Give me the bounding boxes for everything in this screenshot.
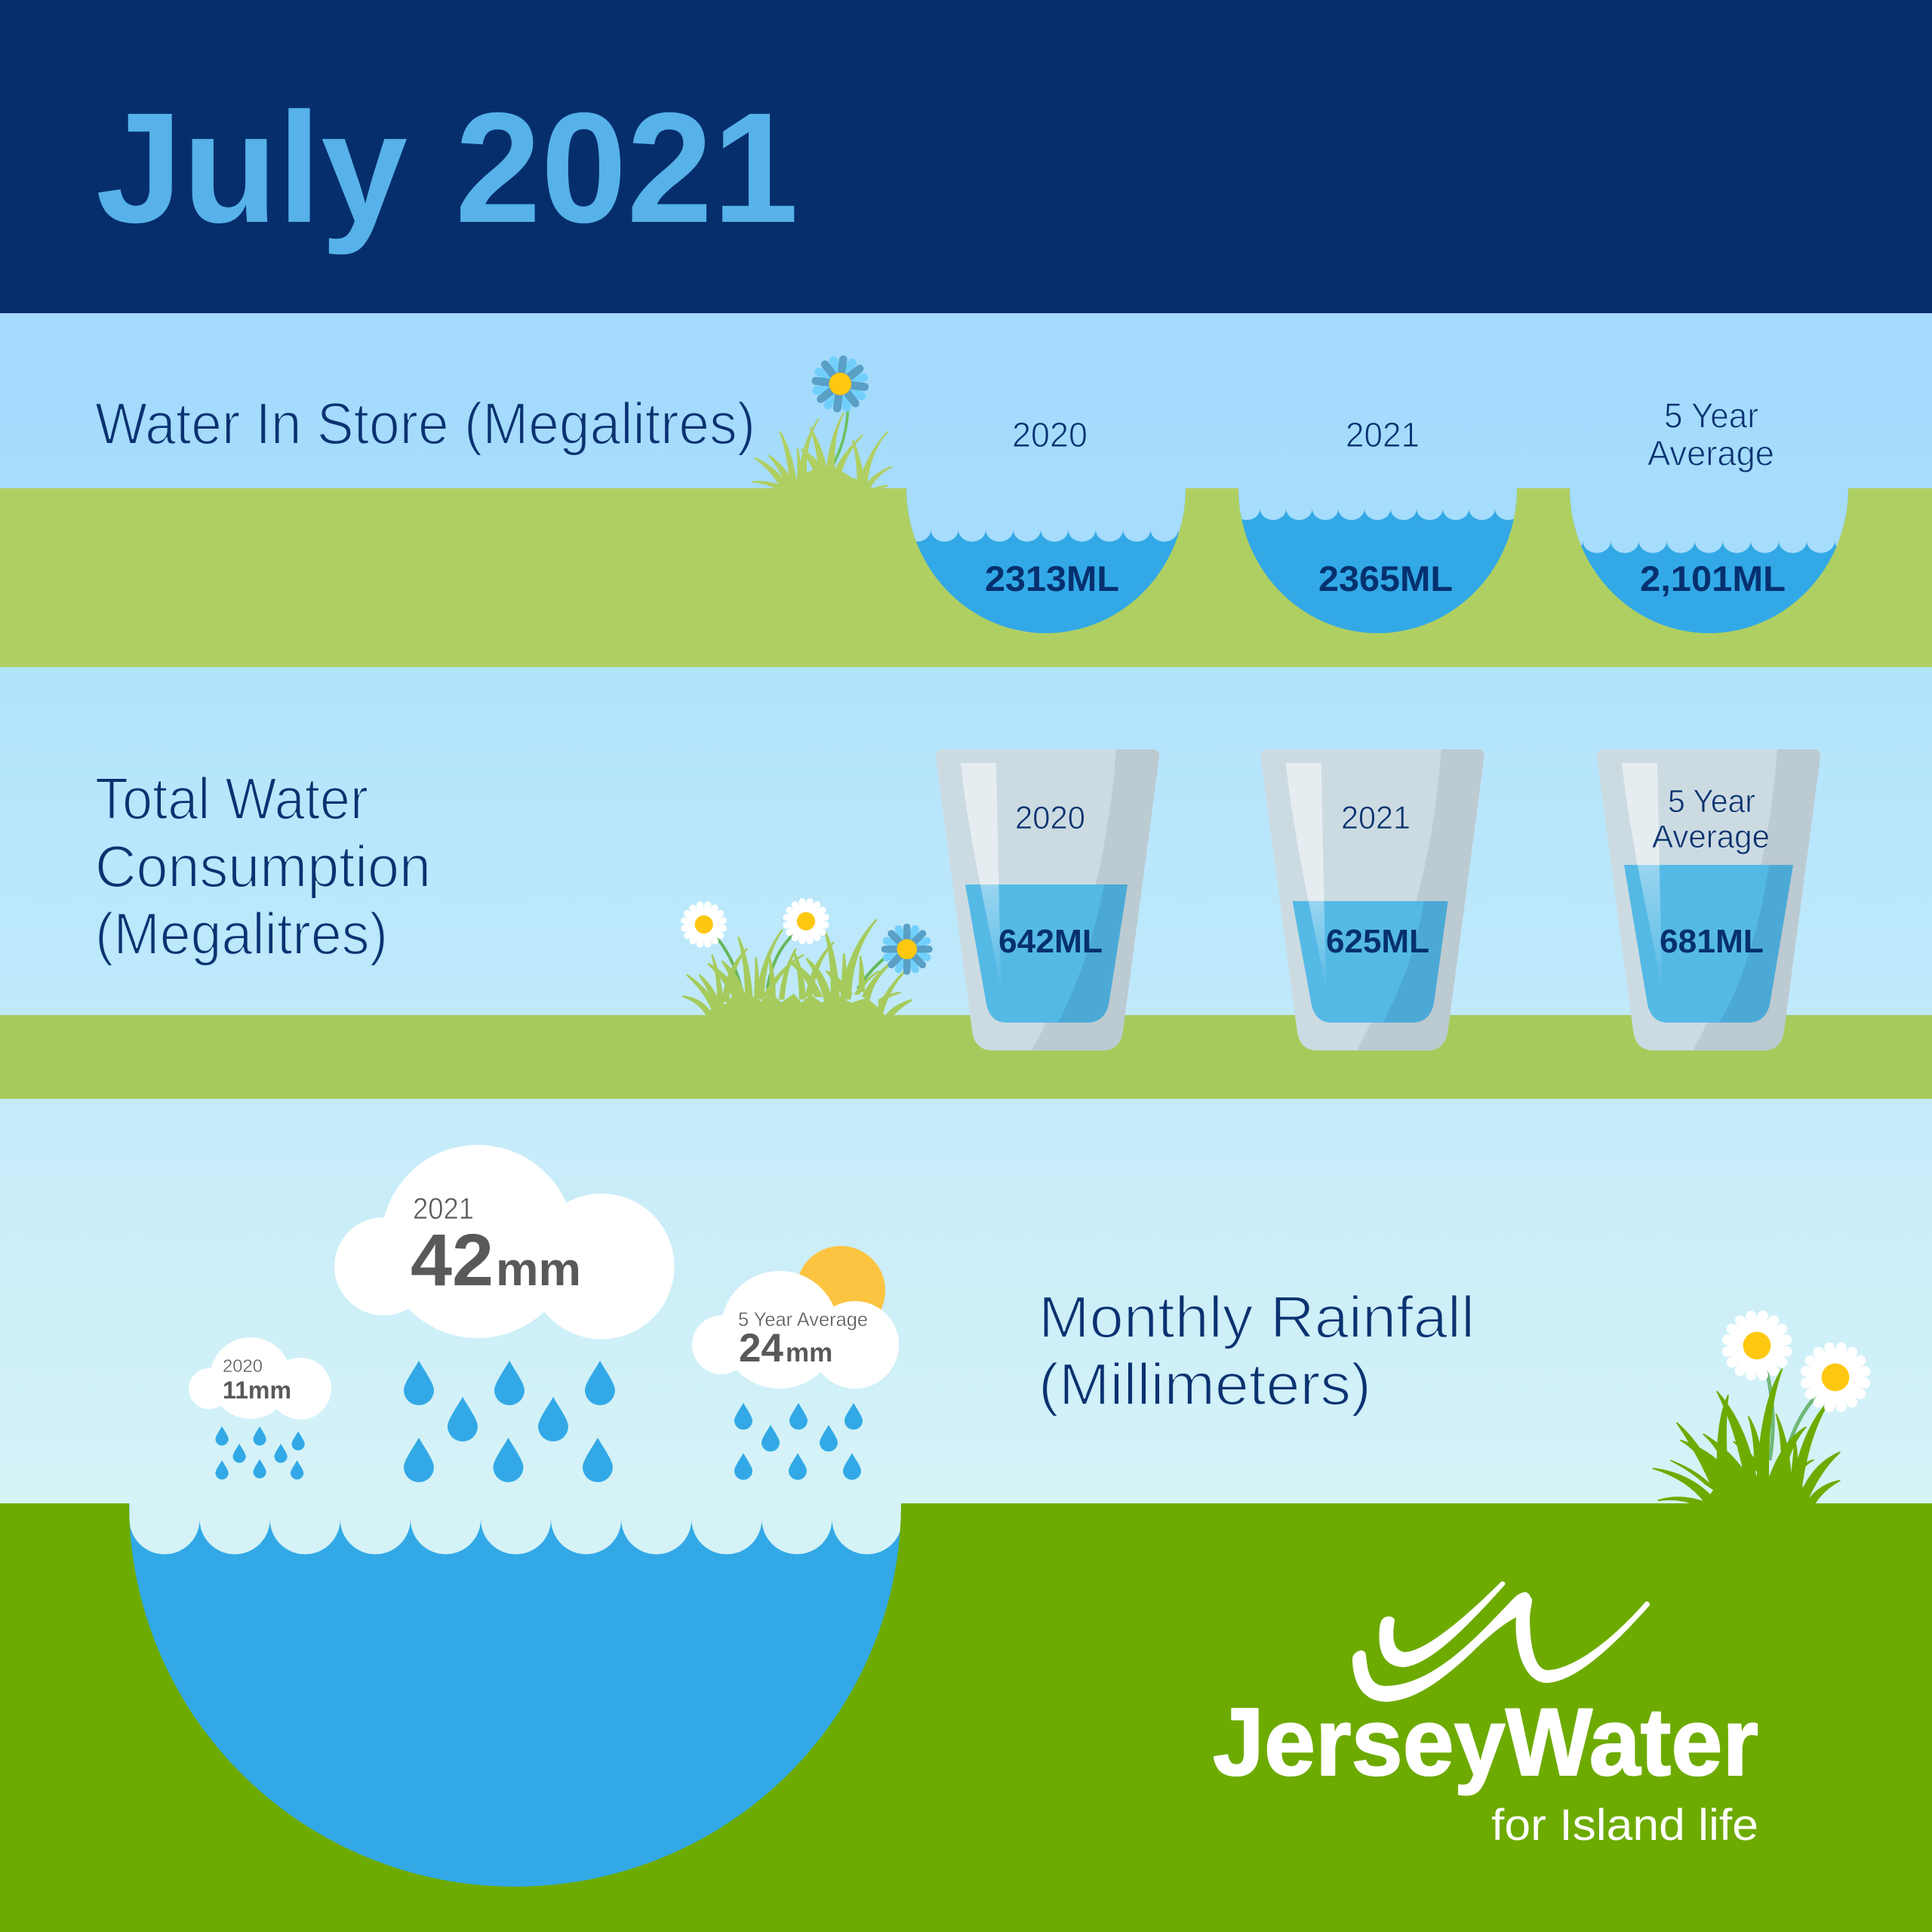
value: 42mm	[411, 1219, 581, 1301]
logo wordmark: JerseyWater	[1213, 1688, 1758, 1795]
value: 42mm: mm	[496, 1244, 581, 1296]
label: 2020: 2020	[1012, 415, 1088, 454]
label: 2020: 2020	[223, 1356, 263, 1377]
panel: consumption sky	[0, 667, 1932, 1015]
label: 5 year average: 5 Year Average	[738, 1308, 868, 1331]
value: 2365ML: 2365ML	[1318, 558, 1453, 598]
rain: 2020	[216, 1426, 305, 1479]
value: 11mm: 11mm	[223, 1377, 291, 1404]
heading: water in store: Water In Store (Megalitres)	[95, 390, 755, 457]
header band	[0, 0, 1932, 313]
title	[96, 81, 798, 256]
icon: sun	[796, 1246, 885, 1335]
label: 2021: 2021	[1346, 415, 1420, 454]
cloud: 5 year average	[692, 1271, 899, 1389]
reservoir: 2021	[1234, 415, 1521, 633]
label: 5 year average	[1652, 783, 1770, 855]
reservoir: 5 year average	[1570, 404, 1848, 633]
heading: monthly rainfall: (Millimeters)	[1038, 1351, 1371, 1417]
glass: 2020	[936, 749, 1159, 1051]
cloud: 2021	[334, 1145, 675, 1339]
value: 2,101ML: 2,101ML	[1640, 558, 1786, 598]
reservoir: large rainfall pond	[129, 1498, 903, 1887]
glass: 5 year average	[1597, 749, 1820, 1051]
value: 642ML: 642ML	[998, 923, 1103, 960]
label: 5 year average: Average	[1652, 819, 1770, 855]
label: 2020: 2020	[1015, 800, 1085, 836]
value: 2313ML: 2313ML	[985, 558, 1119, 598]
heading: monthly rainfall: Monthly Rainfall	[1038, 1284, 1475, 1350]
rain: 5 year average	[734, 1403, 863, 1480]
logo mark	[1352, 1581, 1650, 1702]
panel: water in store ground	[0, 488, 1932, 667]
reservoir: 2020	[906, 423, 1186, 633]
label: 5 year average: Average	[1647, 433, 1774, 472]
panel: rainfall ground	[0, 1503, 1932, 1932]
label: 5 year average: 5 Year	[1664, 395, 1758, 435]
glass: 2021	[1261, 749, 1484, 1051]
icon: grass with daisies	[1653, 1310, 1871, 1503]
logo: Jersey Water	[1213, 1581, 1758, 1850]
title: July	[96, 81, 408, 256]
value: 24mm: 24mm	[739, 1326, 832, 1371]
cloud: 2020	[189, 1337, 331, 1420]
panel: water in store sky	[0, 313, 1932, 488]
icon: grass and blue flower	[752, 352, 892, 489]
heading: total water consumption: Total Water	[95, 765, 368, 832]
label: 5 year average: 5 Year	[1668, 783, 1755, 820]
label: 2021: 2021	[1341, 800, 1411, 836]
title: 2021	[455, 81, 798, 256]
value: 625ML: 625ML	[1326, 923, 1429, 960]
heading: monthly rainfall	[1038, 1284, 1475, 1417]
icon: grass with daisies and blue flower	[680, 897, 933, 1016]
panel: consumption ground	[0, 1015, 1932, 1099]
value: 42mm: 42	[411, 1219, 494, 1301]
rain: 2021	[404, 1361, 615, 1482]
label: 2021: 2021	[413, 1192, 474, 1226]
logo tagline: for Island life	[1491, 1801, 1758, 1850]
heading: total water consumption	[95, 765, 431, 967]
value: 681ML: 681ML	[1660, 923, 1764, 960]
label: 5 year average	[1647, 395, 1774, 472]
panel: rainfall sky	[0, 1099, 1932, 1503]
heading: total water consumption: (Megalitres)	[95, 900, 388, 967]
heading: total water consumption: Consumption	[95, 833, 431, 900]
